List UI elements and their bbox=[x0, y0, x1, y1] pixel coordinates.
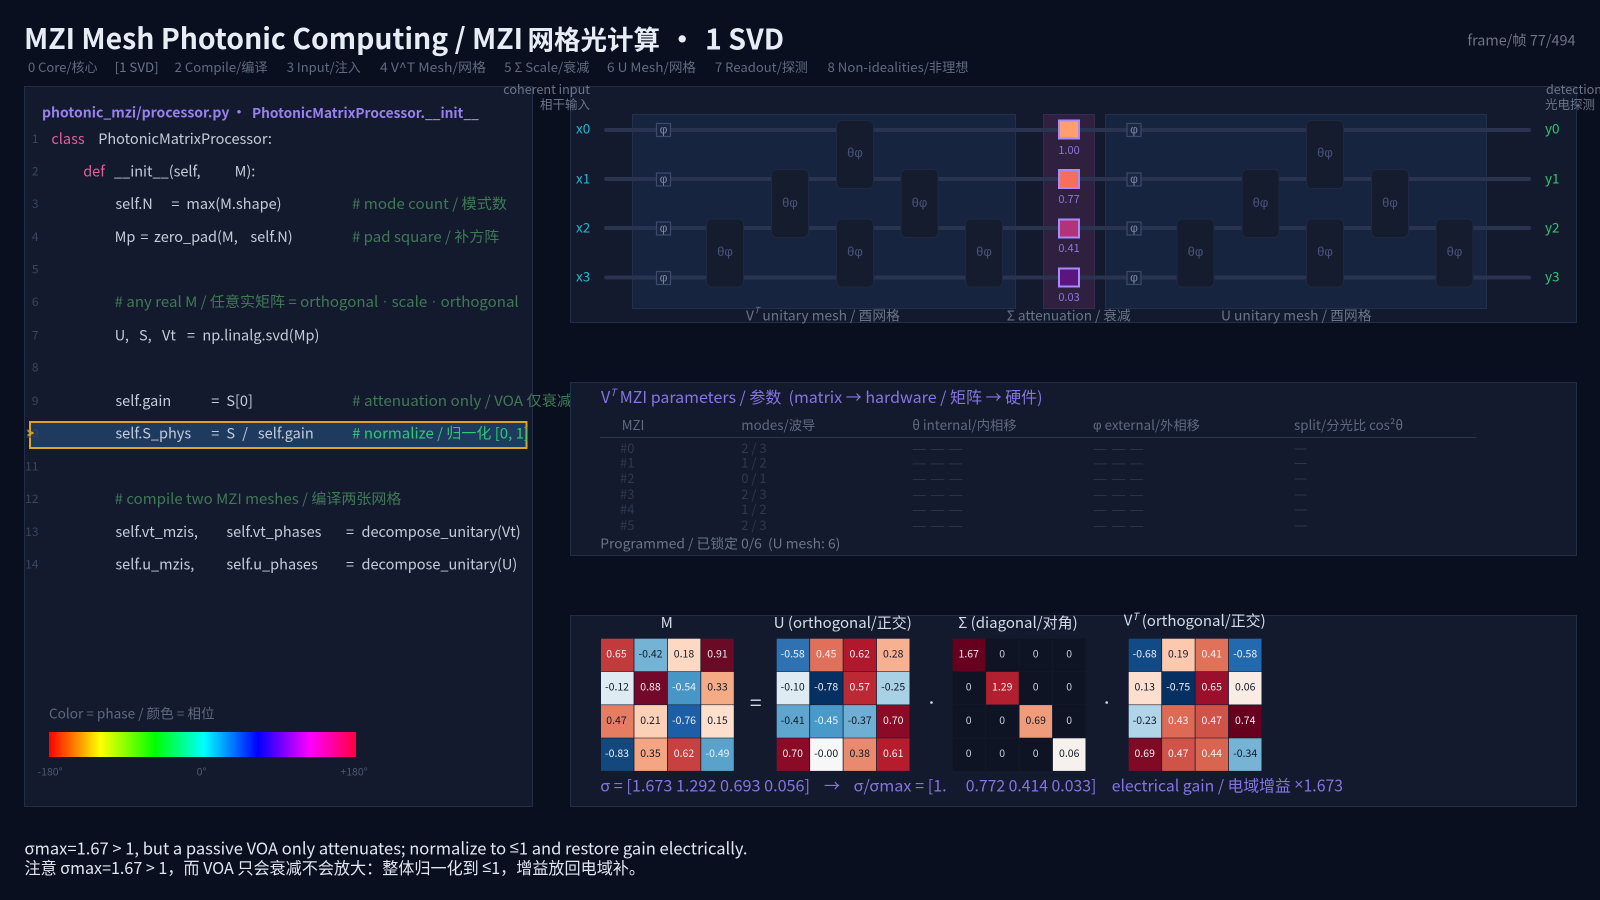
table header row: split/分光比 cos²θ bbox=[1294, 415, 1403, 434]
table header row: θ internal/内相移 bbox=[912, 415, 1017, 434]
U MZI cells: θφ bbox=[1317, 145, 1333, 160]
heatmap: Sigma: 0.69 bbox=[1025, 713, 1046, 728]
heatmap: M: 0.18 bbox=[674, 646, 694, 661]
heatmap: V^T: -0.75 bbox=[1166, 680, 1190, 695]
panel: source code bbox=[24, 86, 573, 806]
heatmap: Sigma: 0 bbox=[1033, 680, 1039, 695]
phase colour legend bbox=[37, 702, 368, 779]
U external phase shifters: φ bbox=[1130, 122, 1138, 136]
panel: SVD matrices bbox=[570, 608, 1576, 806]
table rows: 2 / 3 bbox=[741, 515, 767, 534]
code lines: np.linalg.svd(Mp) bbox=[202, 324, 319, 346]
singular value summary: → bbox=[824, 773, 840, 797]
heatmap: V^T: 0.65 bbox=[1201, 680, 1222, 695]
table rows: — — — bbox=[912, 468, 963, 487]
code lines: self.u_phases bbox=[226, 554, 318, 574]
VOA attenuators: 1.00 bbox=[1058, 142, 1080, 158]
table rows: 1 / 2 bbox=[741, 499, 767, 518]
section captions bbox=[746, 303, 1372, 325]
table rows: #5 bbox=[620, 515, 634, 534]
singular value summary: 0.772 0.414 0.033] bbox=[966, 773, 1096, 797]
code file heading: PhotonicMatrixProcessor.__init__ bbox=[252, 102, 479, 122]
input port labels: x1 bbox=[576, 168, 590, 188]
heatmap: V^T: 0.44 bbox=[1201, 746, 1222, 761]
singular value summary: σ = [1.673 1.292 0.693 0.056] bbox=[600, 773, 810, 797]
heatmap: M: -0.49 bbox=[705, 746, 730, 761]
heatmap: U: 0.38 bbox=[849, 746, 870, 761]
VOA attenuators: 0.03 bbox=[1058, 289, 1080, 305]
code lines: 2 bbox=[32, 162, 39, 180]
U MZI cells: θφ bbox=[1253, 195, 1268, 210]
code lines: 4 bbox=[32, 228, 39, 245]
section captions: V bbox=[746, 305, 754, 325]
code lines: Vt bbox=[162, 324, 176, 346]
code lines: self.vt_mzis, bbox=[115, 521, 198, 542]
phase colour legend: -180° bbox=[37, 764, 63, 779]
code lines: # pad square / 补方阵 bbox=[352, 226, 499, 247]
heatmap: Sigma: 0.06 bbox=[1059, 746, 1080, 761]
heatmap: U: -0.45 bbox=[814, 713, 838, 728]
table heading: V bbox=[601, 384, 610, 408]
V^T mesh background bbox=[632, 114, 1016, 308]
detection label: 光电探测 bbox=[1545, 94, 1595, 113]
code lines: 14 bbox=[25, 556, 39, 572]
waveguides bbox=[606, 130, 1529, 278]
singular value summary: electrical gain / 电域增益 ×1.673 bbox=[1112, 773, 1343, 797]
code lines: # normalize / 归一化 [0, 1] bbox=[352, 422, 529, 444]
code lines: self.N) bbox=[250, 226, 293, 247]
table rows: — — — bbox=[912, 484, 963, 503]
output port labels: y0 bbox=[1545, 118, 1560, 138]
heatmap: Sigma: 0 bbox=[1066, 646, 1072, 661]
output port labels bbox=[1545, 118, 1560, 286]
code lines: = bbox=[346, 554, 354, 574]
code lines: self.S_phys bbox=[115, 422, 191, 444]
input port labels: x2 bbox=[576, 216, 590, 236]
heatmap: U: -0.00 bbox=[814, 746, 838, 761]
U MZI cells: θφ bbox=[1382, 195, 1398, 210]
table rows: — bbox=[1294, 483, 1307, 504]
phase colour legend: 0° bbox=[197, 764, 206, 779]
code lines: S bbox=[226, 422, 235, 444]
code lines: self.gain bbox=[258, 422, 314, 444]
heatmap: M: 0.91 bbox=[707, 646, 728, 661]
code lines: 5 bbox=[32, 260, 39, 278]
matrix titles: U (orthogonal/正交) bbox=[774, 612, 912, 633]
navigation steps: 3 Input/注入 bbox=[287, 57, 361, 76]
heatmap: U: 0.28 bbox=[883, 646, 904, 661]
table rows: — — — bbox=[912, 515, 963, 534]
heatmap: Sigma: 0 bbox=[966, 680, 972, 695]
code lines: 12 bbox=[25, 490, 39, 507]
table rows: #0 bbox=[620, 438, 634, 457]
table rows bbox=[620, 437, 1307, 535]
footnote: σmax=1.67 > 1, but a passive VOA only attenuates; normalize to ≤1 and restore gain electrically. bbox=[24, 836, 748, 860]
heatmap: U: 0.61 bbox=[883, 746, 904, 761]
heatmap: V^T: -0.68 bbox=[1133, 646, 1157, 661]
code lines: 10 bbox=[25, 424, 39, 442]
table rows: — — — bbox=[912, 499, 963, 518]
coherent input label bbox=[503, 79, 590, 113]
table rows: — — — bbox=[912, 438, 963, 457]
heatmap: M: 0.21 bbox=[640, 713, 661, 728]
heatmap: M: 0.35 bbox=[640, 746, 661, 761]
matrix titles bbox=[661, 608, 1266, 633]
code lines: 3 bbox=[32, 195, 38, 212]
table rows: — — — bbox=[1093, 484, 1144, 503]
section captions: unitary mesh / 酉网格 bbox=[759, 305, 900, 325]
code lines: S, bbox=[139, 324, 152, 346]
code lines: PhotonicMatrixProcessor: bbox=[98, 128, 272, 149]
heatmap: M bbox=[601, 639, 734, 771]
code lines: 9 bbox=[32, 392, 38, 409]
heatmap: V^T bbox=[1129, 639, 1262, 771]
V^T MZI cells: θφ bbox=[847, 244, 863, 259]
heatmap: U: -0.37 bbox=[848, 713, 872, 728]
footnote: 注意 σmax=1.67 > 1，而 VOA 只会衰减不会放大：整体归一化到 ≤1，增益放回电域补。 bbox=[24, 855, 645, 879]
phase colour legend: Color = phase / 颜色 = 相位 bbox=[49, 702, 215, 722]
matrix titles: Σ (diagonal/对角) bbox=[958, 612, 1078, 633]
output port labels: y1 bbox=[1545, 168, 1560, 188]
table heading: MZI parameters / 参数 (matrix → hardware / 矩阵 → 硬件) bbox=[616, 384, 1043, 408]
heatmap: V^T: -0.34 bbox=[1233, 746, 1257, 761]
heatmap: V^T: 0.19 bbox=[1168, 646, 1189, 661]
heatmap: V^T: 0.74 bbox=[1235, 713, 1256, 728]
V^T MZI cells: θφ bbox=[717, 244, 733, 259]
code lines: 7 bbox=[32, 326, 39, 344]
heatmap: U: -0.78 bbox=[814, 680, 838, 695]
navigation steps: 4 V^T Mesh/网格 bbox=[380, 57, 486, 76]
U MZI cells bbox=[1177, 120, 1473, 287]
code lines: # compile two MZI meshes / 编译两张网格 bbox=[115, 488, 402, 509]
code lines: __init__(self, bbox=[114, 160, 200, 182]
V^T external phase shifters bbox=[656, 122, 670, 284]
frame counter: frame/帧 77/494 bbox=[1467, 29, 1576, 50]
V^T external phase shifters: φ bbox=[660, 221, 668, 235]
VOA attenuators: 0.77 bbox=[1058, 191, 1080, 207]
heatmap: Sigma: 1.67 bbox=[958, 646, 979, 661]
heatmap: Sigma bbox=[953, 639, 1086, 771]
code file heading: · bbox=[232, 103, 246, 123]
section captions: U unitary mesh / 酉网格 bbox=[1221, 305, 1372, 325]
table rows: — — — bbox=[912, 452, 963, 472]
detection label bbox=[1545, 79, 1600, 113]
code lines: zero_pad(M, bbox=[154, 226, 238, 247]
coherent input label: coherent input bbox=[503, 79, 590, 98]
heatmap: M: 0.33 bbox=[707, 680, 728, 695]
panel: MZI parameter table bbox=[570, 382, 1576, 556]
heatmap: U: -0.25 bbox=[881, 680, 905, 695]
U external phase shifters bbox=[1127, 122, 1141, 284]
input port labels: x3 bbox=[576, 266, 590, 286]
code lines: S[0] bbox=[226, 390, 253, 411]
code lines: self.vt_phases bbox=[226, 521, 322, 542]
navigation steps: 7 Readout/探测 bbox=[715, 57, 808, 76]
U external phase shifters: φ bbox=[1130, 270, 1138, 284]
table rows: — — — bbox=[1093, 499, 1144, 518]
code lines: # attenuation only / VOA 仅衰减 bbox=[352, 390, 573, 411]
table rows: #3 bbox=[620, 484, 634, 503]
V^T MZI cells: θφ bbox=[912, 195, 927, 210]
singular value summary bbox=[600, 773, 1343, 797]
table rows: — — — bbox=[1093, 452, 1144, 472]
section captions: T bbox=[754, 303, 761, 316]
code lines: 8 bbox=[32, 358, 39, 376]
heatmap: U: 0.70 bbox=[782, 746, 803, 761]
table rows: — — — bbox=[1093, 515, 1144, 534]
table rows: 2 / 3 bbox=[741, 484, 767, 503]
table rows: — bbox=[1294, 498, 1307, 519]
navigation steps: 2 Compile/编译 bbox=[175, 57, 268, 76]
table header row: φ external/外相移 bbox=[1093, 415, 1200, 434]
heatmap: Sigma: 0 bbox=[1033, 746, 1039, 761]
table header row: modes/波导 bbox=[741, 415, 815, 434]
section captions: Σ attenuation / 衰减 bbox=[1007, 305, 1131, 325]
table rows: 2 / 3 bbox=[741, 438, 767, 457]
code lines: class bbox=[51, 128, 85, 149]
heatmap: V^T: 0.06 bbox=[1235, 680, 1256, 695]
heatmap: U bbox=[777, 639, 910, 771]
code lines bbox=[25, 128, 573, 574]
matrix titles: M bbox=[661, 612, 673, 633]
heatmap: M: 0.65 bbox=[606, 646, 627, 661]
code lines: = bbox=[211, 422, 219, 444]
table rows: 1 / 2 bbox=[741, 452, 767, 472]
code lines: # mode count / 模式数 bbox=[352, 193, 508, 214]
heatmap: V^T: 0.47 bbox=[1168, 746, 1189, 761]
title: MZI Mesh Photonic Computing / MZI bbox=[24, 17, 523, 58]
U external phase shifters: φ bbox=[1130, 221, 1138, 235]
heatmap: Sigma: 0 bbox=[999, 646, 1005, 661]
table rows: #1 bbox=[620, 452, 634, 472]
output port labels: y2 bbox=[1545, 216, 1560, 236]
singular value summary: σ/σmax = [1. bbox=[854, 773, 947, 797]
heatmap: Sigma: 1.29 bbox=[992, 680, 1013, 695]
V^T MZI cells: θφ bbox=[976, 244, 992, 259]
heatmap: V^T: 0.43 bbox=[1168, 713, 1189, 728]
table rows: 0 / 1 bbox=[741, 468, 767, 487]
navigation steps: 6 U Mesh/网格 bbox=[607, 57, 696, 76]
heatmap: V^T: 0.41 bbox=[1201, 646, 1222, 661]
code lines: Mp bbox=[115, 226, 135, 247]
code lines: decompose_unitary(U) bbox=[362, 554, 517, 574]
code lines: = bbox=[187, 324, 195, 346]
U mesh background bbox=[1106, 114, 1486, 308]
heatmap: U: 0.62 bbox=[849, 646, 870, 661]
title: · bbox=[668, 17, 696, 58]
navigation steps: 8 Non-idealities/非理想 bbox=[828, 57, 968, 76]
heatmap: Sigma: 0 bbox=[999, 746, 1005, 761]
table heading: T bbox=[610, 384, 618, 398]
heatmap: M: 0.15 bbox=[707, 713, 728, 728]
equals sign: = bbox=[750, 687, 762, 717]
heatmap: V^T: 0.13 bbox=[1134, 680, 1155, 695]
code lines: 13 bbox=[25, 523, 38, 540]
V^T external phase shifters: φ bbox=[660, 122, 668, 136]
phase colour legend: +180° bbox=[340, 764, 368, 779]
matrix titles: (orthogonal/正交) bbox=[1138, 610, 1266, 630]
heatmap: M: -0.54 bbox=[672, 680, 696, 695]
code lines: 11 bbox=[25, 458, 38, 474]
programmed status: Programmed / 已锁定 0/6 (U mesh: 6) bbox=[600, 532, 840, 552]
table rows: — — — bbox=[1093, 468, 1144, 487]
U MZI cells: θφ bbox=[1317, 244, 1333, 259]
V^T MZI cells: θφ bbox=[782, 195, 798, 210]
table rows: — bbox=[1294, 452, 1307, 472]
code lines: = bbox=[346, 521, 354, 542]
heatmap: Sigma: 0 bbox=[1033, 646, 1039, 661]
U MZI cells: θφ bbox=[1188, 244, 1203, 259]
code lines: / bbox=[242, 422, 248, 444]
VOA attenuators: 0.41 bbox=[1058, 240, 1080, 256]
code lines: def bbox=[83, 160, 106, 182]
highlighted current line bbox=[30, 422, 526, 448]
code lines: decompose_unitary(Vt) bbox=[362, 521, 521, 542]
heatmap: M: -0.83 bbox=[605, 746, 629, 761]
table header row bbox=[600, 415, 1476, 438]
output port labels: y3 bbox=[1545, 266, 1560, 286]
code file heading: photonic_mzi/processor.py bbox=[42, 103, 229, 123]
code lines: > bbox=[27, 424, 34, 442]
code lines: = bbox=[140, 226, 148, 247]
heatmap: U: -0.41 bbox=[781, 713, 805, 728]
heatmap: M: 0.62 bbox=[674, 746, 694, 761]
code lines: U, bbox=[115, 324, 129, 346]
V^T external phase shifters: φ bbox=[660, 270, 668, 284]
heatmap: U: 0.70 bbox=[883, 713, 904, 728]
heatmap: Sigma: 0 bbox=[1066, 713, 1072, 728]
heatmap: Sigma: 0 bbox=[999, 713, 1005, 728]
heatmap: Sigma: 0 bbox=[966, 713, 972, 728]
heatmap: M: 0.88 bbox=[640, 680, 661, 695]
heatmap: Sigma: 0 bbox=[966, 746, 972, 761]
title: 1 SVD bbox=[705, 17, 784, 58]
heatmap: U: 0.57 bbox=[849, 680, 870, 695]
heatmap: M: -0.42 bbox=[638, 646, 663, 661]
code lines: = bbox=[171, 193, 179, 214]
code lines: M): bbox=[235, 160, 255, 182]
matrix titles: V bbox=[1124, 610, 1132, 630]
V^T MZI cells bbox=[706, 120, 1002, 287]
table rows: #4 bbox=[620, 499, 634, 518]
code lines: = bbox=[211, 390, 219, 411]
sigma attenuation background bbox=[1044, 114, 1094, 308]
footnote bbox=[24, 836, 748, 879]
heatmap: M: 0.47 bbox=[606, 713, 627, 728]
code lines: max(M.shape) bbox=[186, 193, 282, 214]
heatmap: V^T: 0.69 bbox=[1134, 746, 1155, 761]
table rows: — bbox=[1294, 437, 1307, 458]
table header row: MZI bbox=[622, 415, 644, 434]
heatmap: M: -0.12 bbox=[605, 680, 629, 695]
panel: photonic circuit bbox=[503, 79, 1600, 325]
code lines: 6 bbox=[32, 293, 39, 310]
table rows: — bbox=[1294, 514, 1307, 535]
VOA attenuators bbox=[1058, 120, 1080, 305]
table rows: #2 bbox=[620, 468, 634, 487]
navigation steps: [1 SVD] bbox=[115, 57, 159, 76]
dot operator 2 bbox=[1105, 701, 1108, 704]
matrix titles: T bbox=[1132, 608, 1140, 622]
code lines: 1 bbox=[32, 130, 38, 147]
navigation steps: 0 Core/核心 bbox=[28, 57, 98, 76]
navigation steps bbox=[28, 57, 968, 76]
code lines: self.N bbox=[115, 193, 153, 214]
input port labels: x0 bbox=[576, 118, 590, 138]
heatmap: U: -0.58 bbox=[781, 646, 805, 661]
code lines: self.gain bbox=[115, 390, 171, 411]
heatmap: U: 0.45 bbox=[816, 646, 837, 661]
U MZI cells: θφ bbox=[1447, 244, 1462, 259]
title: 网格光计算 bbox=[528, 18, 660, 57]
table rows: — — — bbox=[1093, 438, 1144, 457]
heatmap: V^T: -0.58 bbox=[1233, 646, 1257, 661]
V^T external phase shifters: φ bbox=[660, 172, 668, 186]
V^T MZI cells: θφ bbox=[847, 145, 863, 160]
input port labels bbox=[576, 118, 590, 286]
table rows: — bbox=[1294, 467, 1307, 488]
code lines: # any real M / 任意实矩阵 = orthogonal · scale · orthogonal bbox=[115, 291, 519, 312]
heatmap: M: -0.76 bbox=[672, 713, 696, 728]
heatmap: V^T: -0.23 bbox=[1133, 713, 1157, 728]
coherent input label: 相干输入 bbox=[540, 94, 590, 113]
navigation steps: 5 Σ Scale/衰减 bbox=[504, 57, 589, 76]
code lines: self.u_mzis, bbox=[115, 554, 194, 574]
heatmap: Sigma: 0 bbox=[1066, 680, 1072, 695]
heatmap: V^T: 0.47 bbox=[1201, 713, 1222, 728]
dot operator 1 bbox=[930, 701, 933, 704]
heatmap: U: -0.10 bbox=[781, 680, 805, 695]
U external phase shifters: φ bbox=[1130, 172, 1138, 186]
